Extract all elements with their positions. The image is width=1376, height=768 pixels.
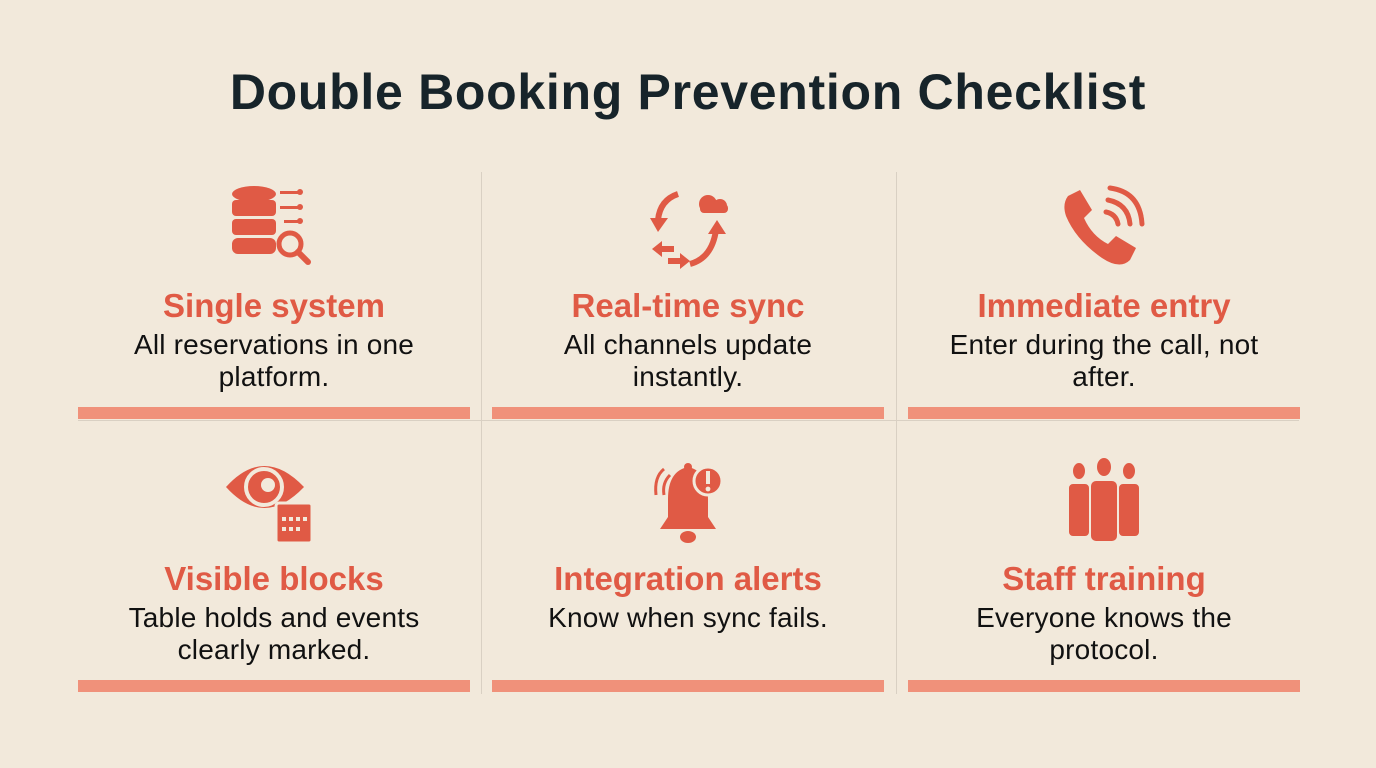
text	[976, 602, 1232, 665]
text: Know when sync fails.	[548, 602, 828, 633]
icon: eye calendar	[226, 466, 310, 542]
panel: visible blocks	[78, 466, 470, 692]
heading: Single system	[163, 287, 385, 324]
panel: real-time sync	[492, 191, 884, 419]
text: Enter during the call, not	[950, 329, 1258, 360]
panel: staff training	[908, 458, 1300, 692]
panel: single system	[78, 186, 470, 419]
text: after.	[1072, 361, 1136, 392]
text: All channels update	[564, 329, 812, 360]
text: clearly marked.	[178, 634, 370, 665]
text: platform.	[219, 361, 329, 392]
heading: Staff training	[1002, 560, 1206, 597]
text: Table holds and events	[129, 602, 419, 633]
text	[564, 329, 812, 392]
heading: Immediate entry	[977, 287, 1231, 324]
text: protocol.	[1049, 634, 1159, 665]
icon: database search	[232, 186, 311, 265]
heading: Integration alerts	[554, 560, 822, 597]
text: instantly.	[633, 361, 743, 392]
icon: bell alert	[654, 463, 720, 543]
panel: integration alerts	[492, 463, 884, 692]
heading: Visible blocks	[164, 560, 384, 597]
text	[950, 329, 1258, 392]
text	[129, 602, 419, 665]
text: Everyone knows the	[976, 602, 1232, 633]
heading: Real-time sync	[572, 287, 804, 324]
text: All reservations in one	[134, 329, 414, 360]
icon: people group	[1069, 458, 1139, 541]
panel: immediate entry	[908, 186, 1300, 419]
icon: sync cloud	[650, 191, 728, 269]
text	[134, 329, 414, 392]
icon: phone	[1064, 186, 1144, 264]
title: Double Booking Prevention Checklist	[230, 64, 1146, 120]
